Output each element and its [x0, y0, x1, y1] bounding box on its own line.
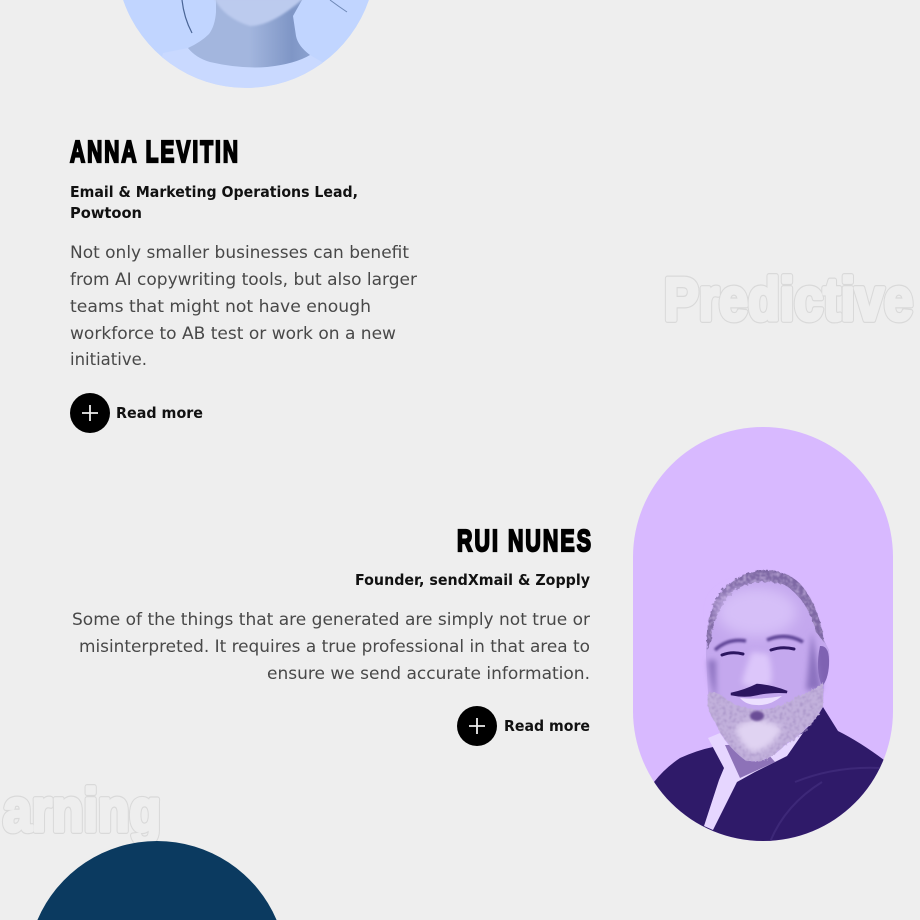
- ear: [818, 646, 829, 686]
- role: Anna Levitin: [70, 183, 358, 222]
- heading: Anna Levitin: ANNA LEVITIN: [70, 134, 240, 169]
- role: Anna Levitin: Email & Marketing Operations Lead,: [70, 183, 358, 201]
- quote: Anna Levitin: Not only smaller businesses can benefit: [70, 243, 409, 263]
- beard highlight: [735, 720, 782, 752]
- quote: Rui Nunes: misinterpreted. It requires a true professional in that area to: [79, 637, 590, 657]
- jacket fold: [770, 768, 880, 842]
- hair: [707, 570, 824, 650]
- portrait background circle: [123, 0, 369, 68]
- shirt: [704, 733, 803, 830]
- read more button: Rui Nunes: Read more: [504, 717, 590, 735]
- neck shadow: [725, 745, 775, 778]
- heading: Rui Nunes: RUI NUNES: [457, 523, 593, 558]
- neck: [188, 0, 310, 67]
- head: [706, 570, 829, 761]
- hair strand right: [330, 0, 347, 12]
- jacket: [650, 707, 884, 850]
- quote: Rui Nunes: ensure we send accurate information.: [267, 664, 590, 684]
- read more button: Rui Nunes: [457, 706, 590, 746]
- quote: Anna Levitin: [70, 243, 417, 370]
- navy circle: [37, 841, 277, 920]
- shirt: [162, 57, 322, 88]
- quote: Anna Levitin: initiative.: [70, 350, 147, 370]
- portrait background pill: [633, 427, 893, 841]
- portrait: Rui Nunes: [633, 427, 893, 850]
- ghost word: arning: arning: [3, 777, 161, 844]
- moustache: [731, 685, 787, 696]
- forehead highlight: [717, 588, 797, 636]
- beard: [708, 682, 823, 761]
- quote: Anna Levitin: teams that might not have enough: [70, 297, 371, 317]
- quote: Rui Nunes: Some of the things that are generated are simply not true or: [72, 610, 590, 630]
- temple shadow: [705, 636, 824, 694]
- quote: Anna Levitin: from AI copywriting tools, but also larger: [70, 270, 417, 290]
- portrait: Anna Levitin: [123, 0, 369, 88]
- quote: Anna Levitin: workforce to AB test or work on a new: [70, 324, 396, 344]
- nose: [742, 652, 772, 688]
- teeth: [740, 696, 782, 705]
- chin: [214, 0, 304, 26]
- quote: Rui Nunes: [72, 610, 590, 684]
- role: Anna Levitin: Powtoon: [70, 204, 142, 222]
- eyes: [722, 648, 794, 655]
- read more button: Anna Levitin: [70, 393, 203, 433]
- hair strand left: [182, 0, 192, 33]
- eyebrows: [715, 636, 803, 650]
- ghost word: arning: arning: [3, 777, 161, 844]
- soul patch: [750, 711, 764, 721]
- role: Rui Nunes: Founder, sendXmail & Zopply: [355, 571, 590, 589]
- read more button: Anna Levitin: Read more: [116, 404, 203, 422]
